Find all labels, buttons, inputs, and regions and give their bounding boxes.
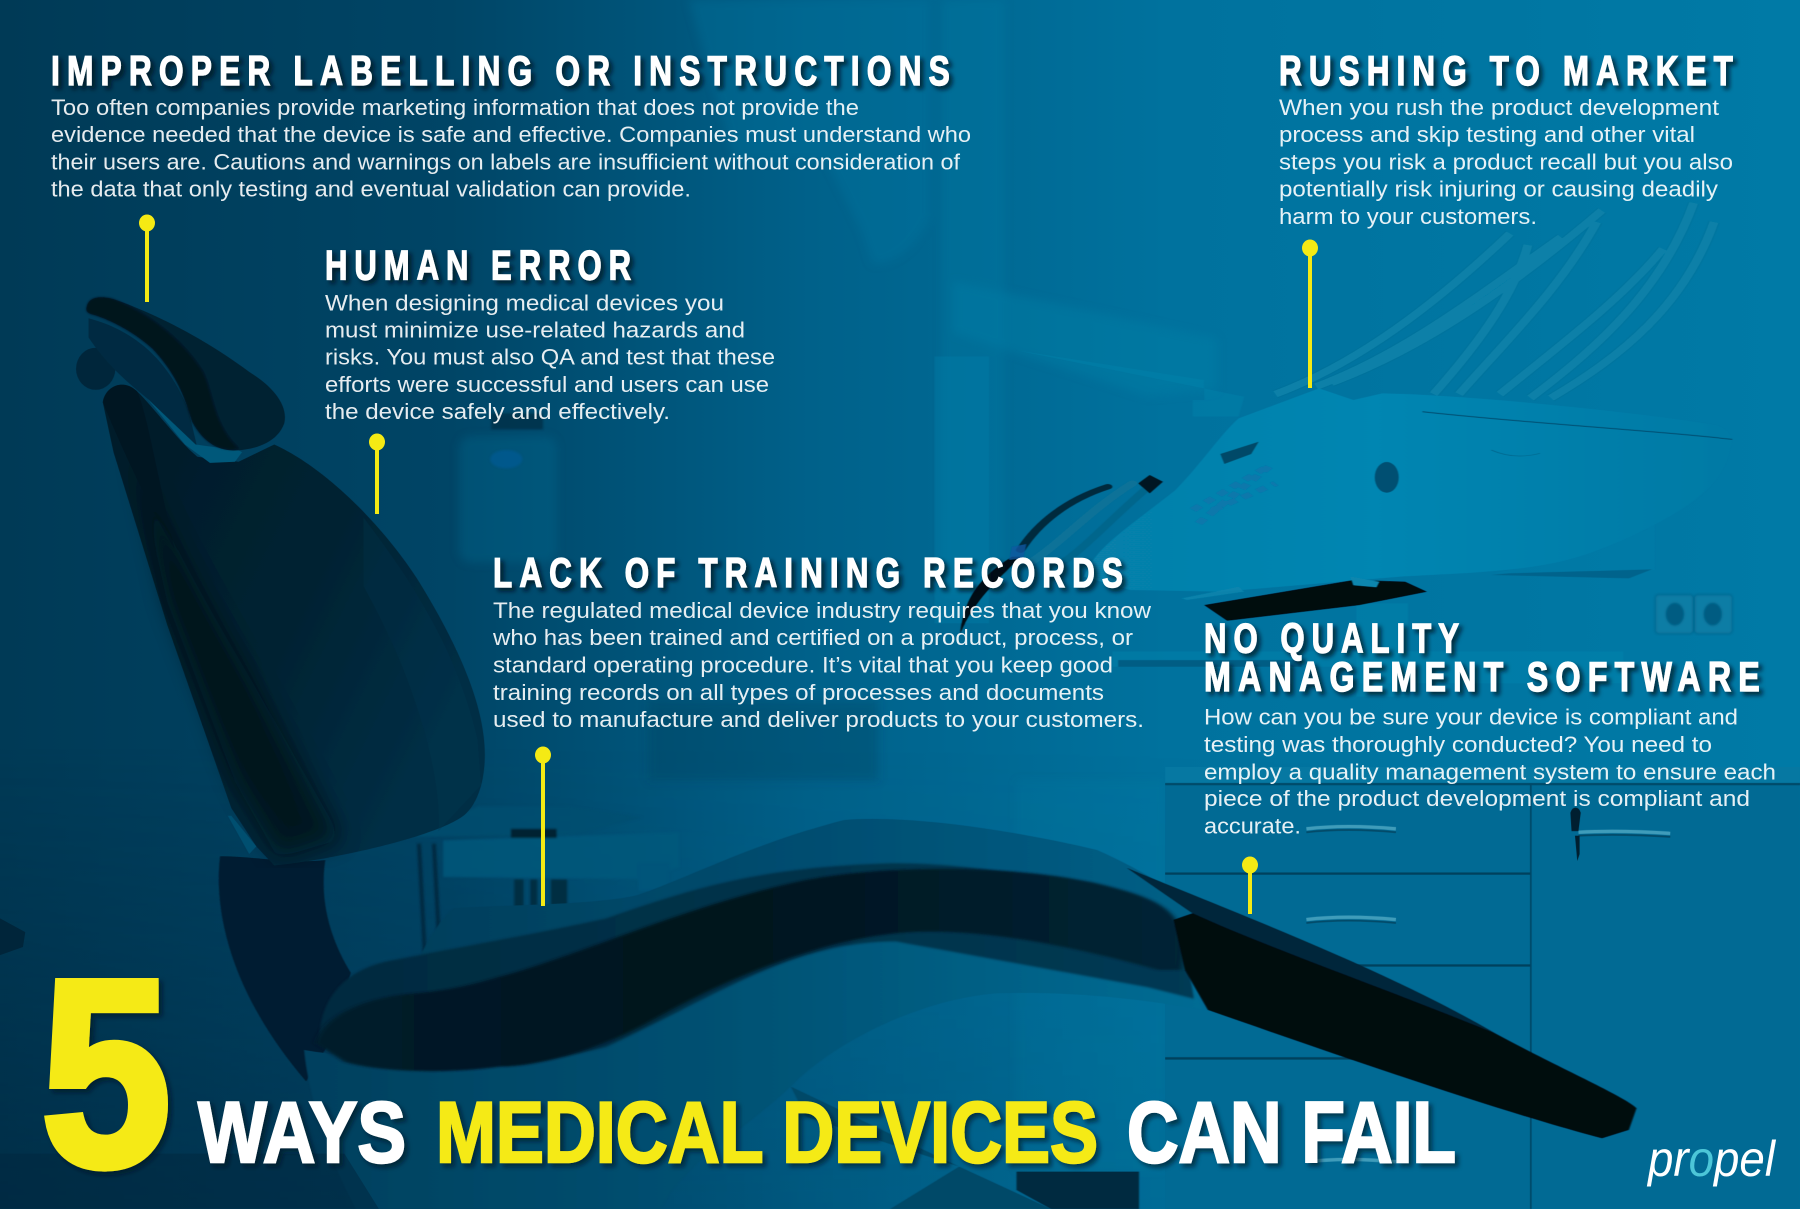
chair: cushion mid-tone [319, 863, 1194, 1066]
body text [1279, 95, 1733, 229]
heading: LACK OF TRAINING RECORDS [493, 549, 1130, 596]
pin [369, 434, 385, 514]
heading: NO QUALITY [1204, 614, 1466, 661]
body text [325, 290, 775, 424]
title: medical devices: MEDICAL DEVICES [436, 1085, 1098, 1181]
chair: leg rest upper edge [1128, 868, 1495, 1033]
pin [535, 746, 551, 906]
body text: training records on all types of processes and documents [493, 680, 1104, 705]
body text: testing was thoroughly conducted? You need to [1204, 732, 1712, 757]
body text [492, 598, 1152, 732]
body text: harm to your customers. [1279, 204, 1537, 229]
floor piece [1017, 1172, 1139, 1209]
title: ways: WAYS [198, 1085, 406, 1181]
heading: IMPROPER LABELLING OR INSTRUCTIONS [51, 47, 957, 94]
body text: who has been trained and certified on a product, process, or [492, 625, 1134, 650]
pin [1302, 240, 1318, 388]
background: hoses [1275, 203, 1714, 398]
body text: must minimize use-related hazards and [325, 318, 745, 342]
background: wall unit [490, 413, 543, 468]
body text: The regulated medical device industry requires that you know [493, 598, 1152, 623]
pin [1242, 856, 1258, 914]
panel: rushing to market [1279, 47, 1740, 388]
background: side table [414, 806, 680, 953]
panel: human error [325, 242, 775, 514]
body text: risks. You must also QA and test that these [325, 345, 775, 370]
body text: efforts were successful and users can use [325, 372, 769, 397]
background: wall sockets [1655, 595, 1732, 634]
heading: HUMAN ERROR [325, 242, 638, 288]
body text: used to manufacture and deliver products to your customers. [493, 707, 1144, 732]
chair: base and upper band [304, 819, 1204, 1209]
body text: their users are. Cautions and warnings on labels are insufficient without consideration of [51, 150, 961, 174]
body text: potentially risk injuring or causing deadily [1279, 176, 1719, 202]
chair: support arm [219, 856, 351, 1081]
body text: evidence needed that the device is safe and effective. Companies must understand who [51, 122, 971, 147]
body text: standard operating procedure. It’s vital that you keep good [493, 653, 1113, 678]
body text: accurate. [1204, 813, 1301, 838]
logo: propel: propel [1646, 1131, 1777, 1187]
body text [51, 95, 971, 202]
panel: improper labelling or instructions [51, 47, 971, 302]
body text: the device safely and effectively. [325, 399, 670, 424]
body text: How can you be sure your device is compliant and [1204, 705, 1738, 730]
chair: dark seat cushion [315, 869, 1184, 1071]
pin [139, 214, 155, 302]
panel: lack of training records [492, 549, 1152, 906]
body text: the data that only testing and eventual validation can provide. [51, 176, 691, 202]
chair: headrest [76, 297, 285, 463]
body text: When you rush the product development [1279, 95, 1720, 120]
chair: seat and leg rest [315, 868, 1636, 1209]
body text: steps you risk a product recall but you also [1279, 150, 1733, 174]
body text: piece of the product development is compliant and [1204, 786, 1750, 811]
body text [1204, 705, 1776, 838]
title: can fail: CAN FAIL [1127, 1085, 1456, 1181]
background: cabinet [1165, 767, 1800, 1209]
background: floor [0, 918, 379, 1209]
chair: black leg rest [1128, 868, 1636, 1138]
body text: Too often companies provide marketing information that does not provide the [51, 95, 859, 120]
body text: When designing medical devices you [325, 290, 724, 316]
chair: backrest [103, 385, 485, 866]
body text: process and skip testing and other vital [1279, 122, 1695, 147]
background: instrument unit [934, 350, 1732, 697]
panel: no quality management software [1204, 614, 1776, 914]
title [41, 925, 1456, 1209]
body text: employ a quality management system to ensure each [1204, 759, 1776, 784]
